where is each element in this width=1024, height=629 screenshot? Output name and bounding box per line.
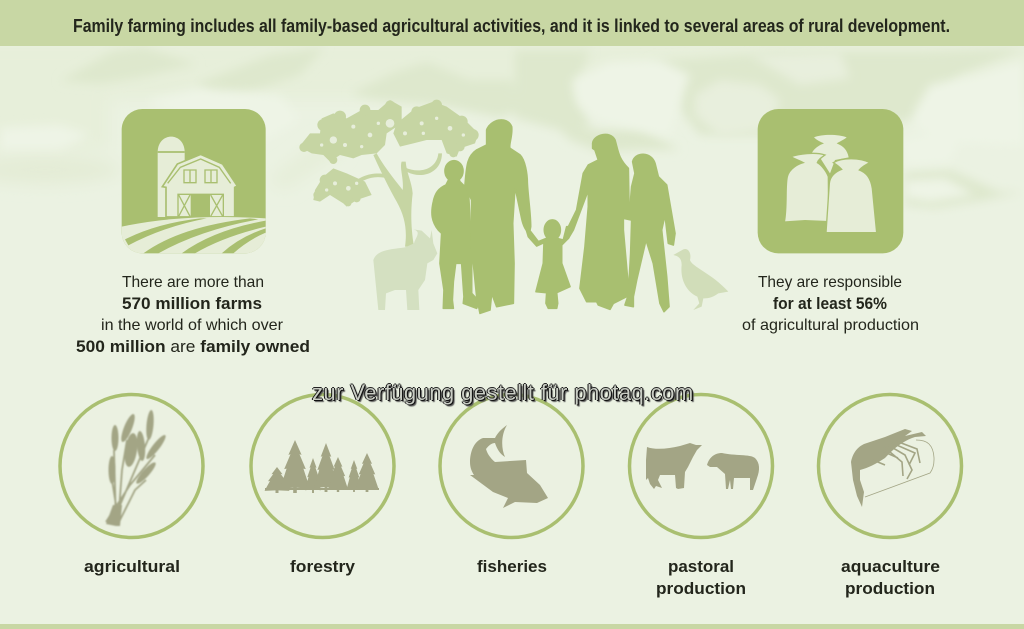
label: aquaculture (841, 557, 940, 576)
duck (673, 249, 728, 310)
label (841, 557, 940, 598)
icon: cow and sheep in circle (630, 394, 772, 598)
bottom strip (0, 624, 1024, 629)
fields (122, 217, 266, 253)
tree (299, 100, 479, 247)
older girl (623, 154, 675, 312)
left sack (784, 153, 829, 222)
icon: shrimp in circle (818, 394, 962, 598)
left statistic text: There are more than (122, 274, 264, 291)
icon: barn and fields (122, 109, 266, 253)
background clouds (0, 40, 1024, 208)
label: fisheries (477, 557, 547, 576)
label: pastoral (668, 557, 734, 576)
mother (566, 134, 629, 309)
left statistic text: in the world of which over (101, 317, 284, 334)
right statistic text: They are responsible (758, 274, 902, 291)
label: agricultural (84, 557, 180, 576)
right statistic text (742, 274, 919, 334)
tree canopy gaps (320, 117, 465, 192)
label (656, 557, 746, 598)
icon: grain sacks (758, 109, 903, 253)
label: production (845, 579, 935, 598)
icon: fish in circle (440, 394, 583, 576)
icon: wheat in circle (60, 394, 203, 576)
back sack (812, 135, 849, 173)
label: forestry (290, 557, 356, 576)
boy (432, 161, 479, 308)
left statistic text (76, 274, 310, 356)
silo (158, 137, 185, 217)
family scene (299, 100, 728, 313)
father (465, 120, 531, 313)
label: production (656, 579, 746, 598)
small girl (525, 220, 574, 308)
watermark: zur Verfügung gestellt für photaq.com (312, 380, 694, 405)
left statistic text: 500 million are family owned (76, 337, 310, 356)
barn (162, 154, 237, 217)
top banner (0, 0, 1024, 46)
right statistic text: of agricultural production (742, 317, 919, 334)
right statistic text: for at least 56% (773, 294, 887, 313)
goat (373, 229, 437, 310)
right sack (826, 159, 877, 233)
icon: forest in circle (251, 394, 394, 576)
left statistic text: 570 million farms (122, 294, 262, 313)
